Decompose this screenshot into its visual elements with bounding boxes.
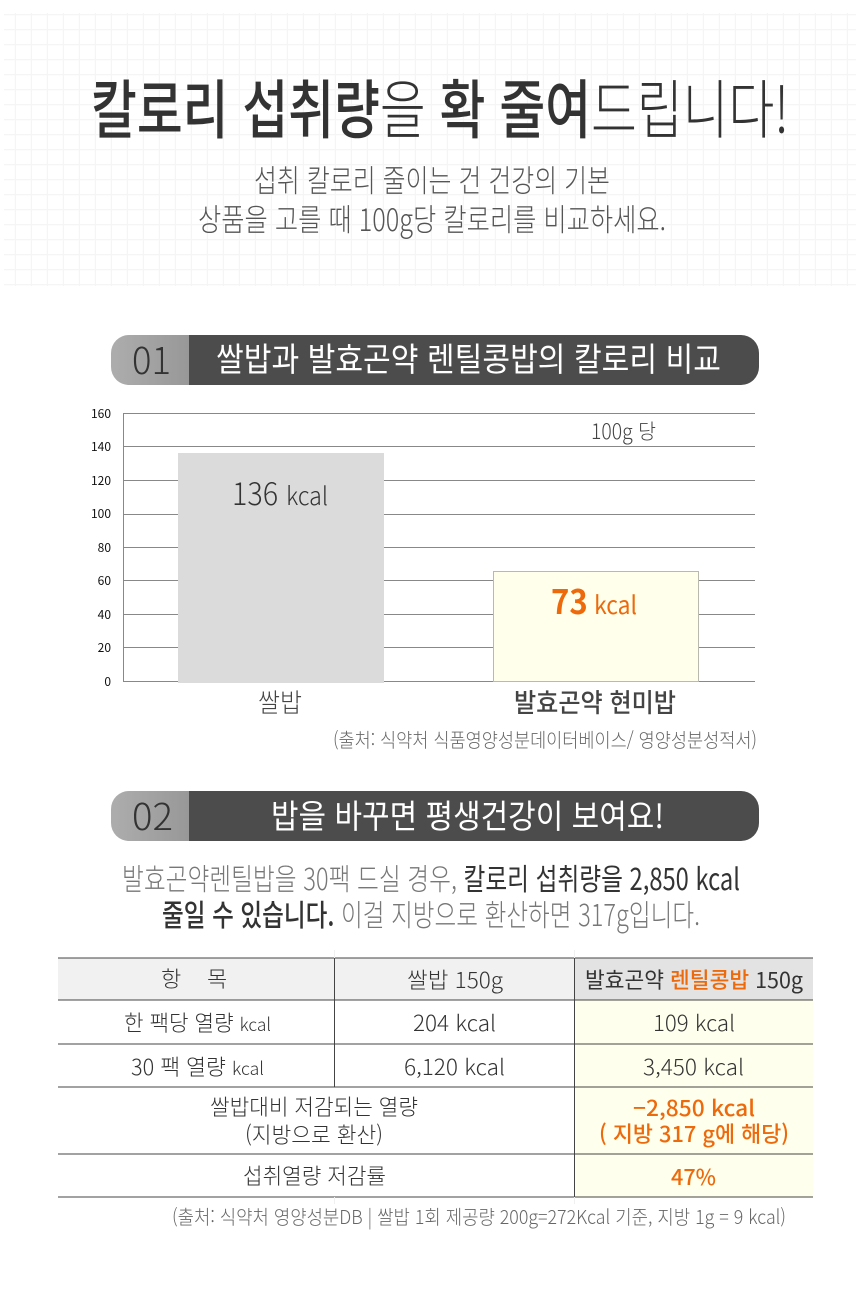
bar: konjac rice: 73 kcal [551, 575, 637, 624]
title: 칼로리 섭취량을 확 줄여드립니다! [91, 60, 789, 152]
y axis labels: 60 [98, 572, 111, 589]
table header: 목 [207, 962, 227, 994]
row: 30 packs: 30 팩 열량 kcal [131, 1050, 264, 1082]
row: 30 packs: 6,120 kcal [404, 1050, 505, 1082]
unit note: 100g 당 [591, 416, 656, 446]
source note 1: (출처: 식약처 식품영양성분데이터베이스/ 영양성분성적서) [333, 724, 757, 753]
y axis labels: 140 [91, 438, 111, 455]
y axis labels: 20 [98, 639, 111, 656]
y axis labels [91, 405, 111, 690]
bar: rice: 136 kcal [232, 469, 328, 514]
paragraph: 줄일 수 있습니다. 이걸 지방으로 환산하면 317g입니다. [162, 891, 700, 935]
y axis labels: 120 [91, 472, 111, 489]
y axis labels: 160 [91, 405, 111, 422]
y axis labels: 0 [104, 673, 111, 690]
x axis labels: 쌀밥 [258, 683, 302, 720]
source note 2: (출처: 식약처 영양성분DB | 쌀밥 1회 제공량 200g=272Kcal 기준, 지방 1g = 9 kcal) [172, 1201, 786, 1230]
section header 01: 01 [132, 331, 171, 385]
section header 02: 02 [132, 787, 173, 841]
row: 30 packs: 3,450 kcal [643, 1050, 744, 1082]
row: reduction rate [243, 1159, 716, 1192]
x axis labels: 발효곤약 현미밥 [514, 683, 676, 720]
row: per pack: 109 kcal [653, 1006, 735, 1038]
comparison table [58, 950, 813, 1204]
bar: konjac rice [494, 572, 698, 682]
subtitle [198, 156, 666, 240]
row: reduction rate: 섭취열량 저감률 [243, 1159, 386, 1191]
section header 02: 밥을 바꾸면 평생건강이 보여요! [271, 790, 664, 838]
table header: 항 [161, 962, 181, 994]
table header: 발효곤약 렌틸콩밥 150g [585, 963, 804, 995]
subtitle: 섭취 칼로리 줄이는 건 건강의 기본 [254, 156, 610, 201]
section header 01: 쌀밥과 발효곤약 렌틸콩밥의 칼로리 비교 [216, 333, 721, 381]
bar: rice [178, 453, 384, 683]
y axis labels: 80 [98, 539, 111, 556]
row: reduced calories: (지방으로 환산) [245, 1118, 383, 1150]
row: reduction rate: 47% [671, 1160, 716, 1192]
row: per pack: 204 kcal [413, 1006, 496, 1038]
row: reduced calories [210, 1090, 789, 1150]
row: reduced calories: 쌀밥대비 저감되는 열량 [210, 1090, 418, 1122]
section header 02 [111, 787, 759, 841]
row: reduced calories: −2,850 kcal [633, 1091, 755, 1123]
y axis labels: 40 [98, 606, 111, 623]
row: per pack: 한 팩당 열량 kcal [124, 1006, 271, 1038]
row: 30 packs [131, 1050, 744, 1082]
x axis labels [258, 683, 676, 720]
y axis labels: 100 [91, 505, 111, 522]
table header [161, 962, 804, 995]
bar chart [91, 405, 755, 720]
table header: 쌀밥 150g [407, 963, 503, 995]
row: reduced calories: ( 지방 317 g에 해당) [599, 1117, 789, 1149]
paragraph: 발효곤약렌틸밥을 30팩 드실 경우, 칼로리 섭취량을 2,850 kcal [122, 855, 740, 899]
subtitle: 상품을 고를 때 100g당 칼로리를 비교하세요. [198, 195, 666, 240]
row: per pack [124, 1006, 735, 1038]
paragraph [122, 855, 740, 935]
